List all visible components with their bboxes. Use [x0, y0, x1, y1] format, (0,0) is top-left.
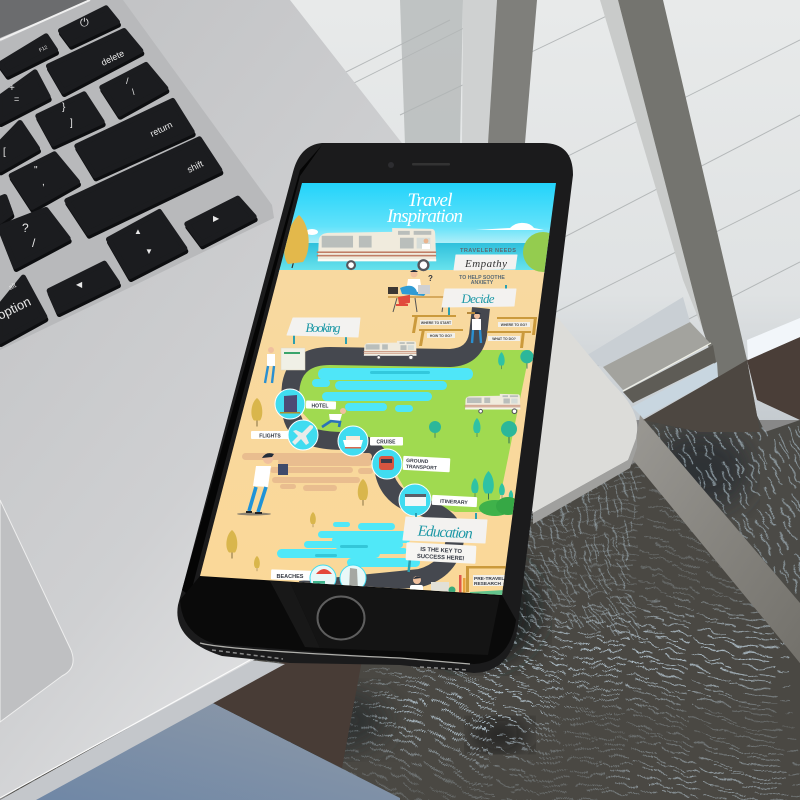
- background: dark fur rug seen through glass: [0, 330, 800, 800]
- stop: beaches: [271, 565, 336, 591]
- stop: ground transport: [372, 449, 450, 479]
- sign: booking: [287, 318, 360, 344]
- background: floor with white wood planks: [0, 0, 800, 432]
- laptop: trackpad: [0, 500, 73, 722]
- stop: itinerary: [399, 484, 477, 516]
- illustration: standing man with book: [237, 453, 288, 516]
- sign: education: Education: [416, 523, 473, 542]
- text: title: Travel: [408, 190, 452, 211]
- scene: river on meadow: [312, 368, 473, 412]
- scene: road: [290, 308, 481, 590]
- stop: flights: FLIGHTS: [259, 434, 281, 440]
- laptop: key legends: ,: [42, 177, 45, 188]
- illustration: small camper on road: [363, 341, 417, 360]
- illustration: person with board: [265, 347, 305, 383]
- text: to help soothe anxiety: TO HELP SOOTHE: [459, 275, 505, 281]
- laptop: key legends: alt: [8, 282, 18, 292]
- signpost: where to start: [412, 315, 456, 333]
- laptop: key legends: ▶: [213, 214, 220, 223]
- laptop: silver body: [0, 0, 637, 800]
- scene: green meadow: [300, 350, 530, 512]
- laptop: key legends: ▼: [145, 247, 153, 256]
- stop: itinerary: ITINERARY: [440, 499, 468, 506]
- background: glass frame corner: [579, 297, 800, 432]
- scene: sea: [278, 243, 548, 273]
- background: glass table edge: [633, 415, 800, 663]
- illustration: crouching person: [322, 408, 346, 427]
- yellow trees: [226, 398, 368, 571]
- stop: hotel: [275, 389, 336, 419]
- text: title: [386, 190, 463, 227]
- stop: landmarks: [340, 565, 366, 591]
- signpost: where to start: WHERE TO START: [421, 321, 452, 325]
- laptop: keyboard well: [0, 0, 274, 350]
- sign: empathy: [454, 255, 517, 270]
- sign: decide: Decide: [460, 291, 495, 306]
- laptop: key legends: ◀: [76, 280, 83, 289]
- illustration: person with laptop at bottom: [410, 576, 456, 595]
- signpost: where to go: [497, 317, 537, 335]
- scene: lower lake: [277, 522, 420, 567]
- text: title: Inspiration: [386, 206, 463, 227]
- laptop: key legends: /: [126, 76, 129, 86]
- laptop: key legends: delete: [99, 48, 126, 68]
- phone: earpiece speaker: [412, 163, 450, 166]
- stop: cruise: CRUISE: [377, 440, 396, 446]
- tree: yellow beach tree: [284, 215, 309, 268]
- stop: ground transport: GROUND: [406, 458, 429, 465]
- laptop: key sides: [1, 11, 255, 344]
- callout: is the key to success here: SUCCESS HERE!: [417, 554, 465, 562]
- laptop: key legends: ?: [22, 221, 29, 235]
- tree: green round tree: [523, 232, 550, 272]
- signpost: what to do: WHAT TO DO?: [492, 337, 516, 341]
- laptop: key legends: F12: [38, 45, 49, 54]
- signpost: how to go: HOW TO GO?: [430, 334, 452, 338]
- illustration: camper on meadow: [465, 394, 520, 414]
- laptop: key legends: /: [32, 236, 36, 250]
- illustration: camper van driver: [422, 239, 430, 249]
- illustration: person at desk: [388, 270, 448, 312]
- laptop: key legends: =: [14, 94, 19, 104]
- sign: decide: [442, 285, 516, 315]
- stop: hotel: HOTEL: [312, 404, 328, 410]
- text: to help soothe anxiety: ANXIETY: [471, 280, 494, 286]
- illustration: person at desk: ?: [428, 274, 433, 283]
- sign: booking: Booking: [306, 320, 341, 335]
- laptop: key legends: [0, 17, 220, 323]
- laptop: key legends: [: [3, 147, 6, 158]
- phone screen: travel inspiration infographic: [190, 183, 570, 600]
- pre-travel research board: PRE-TRAVEL: [474, 576, 504, 582]
- laptop: key legends: shift: [185, 158, 205, 175]
- sign: education: [403, 513, 487, 572]
- signpost: what to do: [487, 331, 531, 348]
- scene: clouds: [306, 223, 544, 235]
- scene: brown dirt patch: [242, 453, 373, 491]
- stop: cruise: [338, 426, 403, 456]
- text: traveler needs: TRAVELER NEEDS: [460, 248, 516, 254]
- callout: is the key to success here: [406, 542, 476, 564]
- stop: ground transport: TRANSPORT: [406, 464, 437, 472]
- laptop: key legends: ]: [70, 118, 73, 129]
- phone: body: [177, 143, 573, 673]
- laptop: key legends: ⏻: [80, 17, 89, 29]
- signpost: where to go: WHERE TO GO?: [501, 323, 527, 327]
- laptop: key tops: [0, 8, 254, 341]
- brown rug patch under laptop: [213, 660, 362, 768]
- laptop: key legends: return: [148, 120, 174, 139]
- blue surface under the laptop: [35, 703, 400, 800]
- scene: sand: [200, 270, 545, 595]
- scene: sky: [286, 183, 556, 245]
- callout: is the key to success here: IS THE KEY TO: [420, 547, 463, 555]
- green trees: [429, 350, 534, 516]
- laptop: key legends: +: [9, 83, 15, 94]
- laptop: key legends: ▲: [134, 227, 142, 236]
- stop: flights: [251, 420, 318, 450]
- pre-travel research board: RESEARCH: [474, 581, 501, 587]
- laptop: key legends: \: [132, 87, 135, 97]
- phone: front camera: [388, 162, 394, 168]
- signpost: how to go: [419, 329, 463, 346]
- laptop: key legends: ": [34, 165, 38, 176]
- pre-travel research board: [459, 566, 509, 596]
- phone: home button: [318, 596, 364, 640]
- laptop: key legends: }: [62, 102, 66, 113]
- sign: empathy: Empathy: [464, 258, 507, 270]
- stop: beaches: BEACHES: [277, 574, 304, 580]
- illustration: large camper van: [317, 228, 436, 270]
- illustration: person with telescope: [467, 312, 481, 343]
